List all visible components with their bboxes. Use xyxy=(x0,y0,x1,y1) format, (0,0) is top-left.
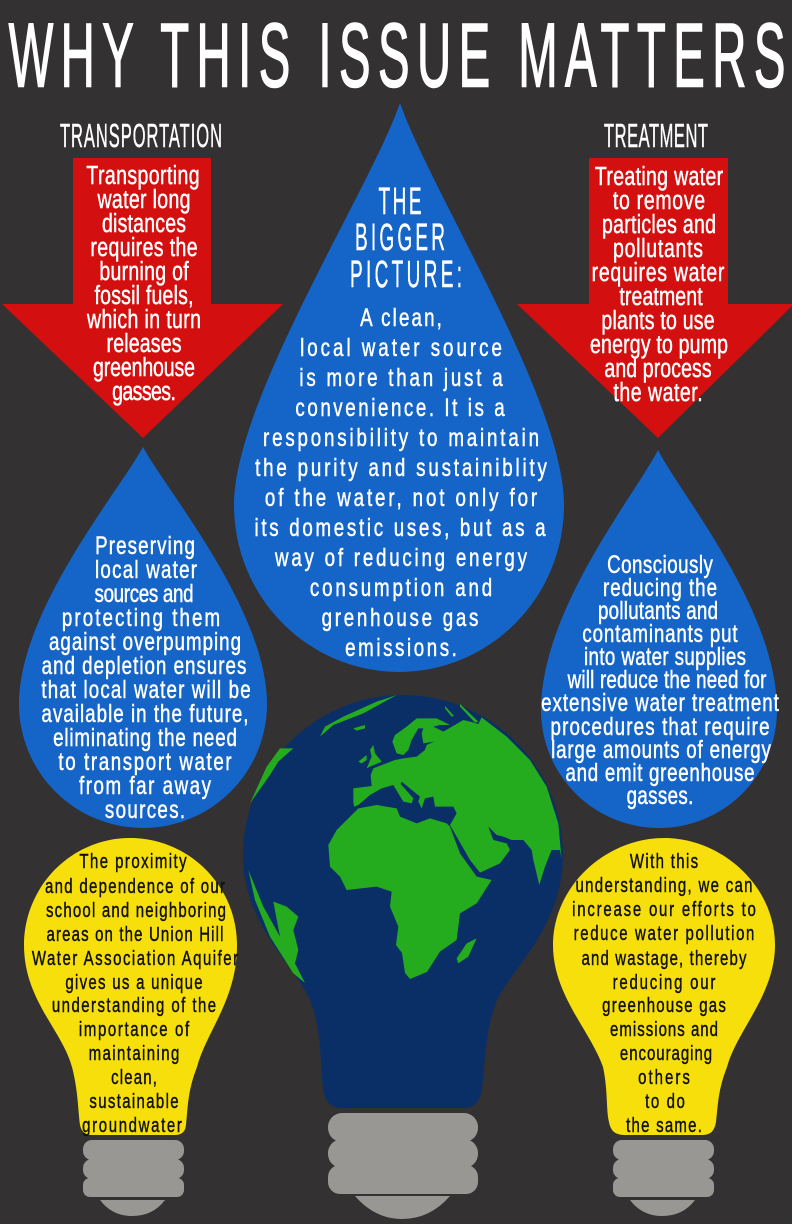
text: preserving local water: eliminating the need xyxy=(53,723,237,752)
panel: globe light bulb xyxy=(243,695,563,1219)
text: preserving local water: to transport water xyxy=(58,747,232,776)
text: transportation body xyxy=(86,160,201,406)
text: with this understanding: With this xyxy=(630,850,698,873)
text: with this understanding: reducing our xyxy=(613,971,715,994)
text: proximity and dependence xyxy=(32,850,238,1137)
text: transportation body: releases xyxy=(106,328,182,358)
text: transportation body: which in turn xyxy=(86,304,201,334)
panel: treatment arrow xyxy=(517,117,792,438)
text: treatment body: energy to pump xyxy=(590,329,728,359)
text: bigger picture body: A clean, xyxy=(360,303,442,332)
text: bigger picture body: way of reducing energy xyxy=(274,543,527,572)
icon: right blue water drop xyxy=(541,450,777,828)
heading: the bigger picture xyxy=(350,181,462,296)
text: bigger picture body xyxy=(255,303,547,662)
text: treatment body: requires water xyxy=(592,257,725,287)
text: treatment body: treatment xyxy=(619,281,703,311)
icon: left bulb glass xyxy=(24,838,237,1135)
panel: right yellow light bulb xyxy=(553,838,775,1216)
text: proximity and dependence: sustainable xyxy=(89,1090,179,1113)
icon: right bulb screw base xyxy=(613,1140,714,1216)
text: bigger picture body: emissions. xyxy=(345,633,457,662)
text: preserving local water: available in the future, xyxy=(41,699,249,728)
text: bigger picture body: convenience. It is a xyxy=(295,393,505,422)
text: with this understanding: increase our efforts to xyxy=(572,898,756,921)
text: consciously reducing pollutants: Consciously xyxy=(607,550,713,579)
text: transportation body: gasses. xyxy=(112,376,176,406)
text: treatment body: pollutants xyxy=(613,233,703,263)
text: preserving local water: that local water will be xyxy=(41,675,251,704)
text: bigger picture body: responsibility to maintain xyxy=(263,423,539,452)
text: bigger picture body: the purity and sustainiblity xyxy=(255,453,547,482)
heading: transportation: TRANSPORTATION xyxy=(60,117,222,155)
text: treatment body: Treating water xyxy=(595,161,723,191)
icon: right bulb glass xyxy=(553,838,775,1135)
text: bigger picture body: its domestic uses, but as a xyxy=(255,513,546,542)
text: consciously reducing pollutants: and emit greenhouse xyxy=(566,758,754,787)
text: proximity and dependence: and dependence of our xyxy=(45,875,225,898)
text: consciously reducing pollutants: large amounts of energy xyxy=(551,735,771,764)
text: treatment body: and process xyxy=(604,353,712,383)
panel: left water drop xyxy=(19,447,267,828)
panel: the bigger picture drop xyxy=(234,103,564,672)
text: proximity and dependence: school and neighboring xyxy=(46,899,226,922)
heading: the bigger picture: BIGGER xyxy=(355,217,445,259)
icon: left bulb screw base xyxy=(83,1140,184,1216)
heading: the bigger picture: PICTURE: xyxy=(350,254,462,296)
text: preserving local water xyxy=(41,531,251,824)
text: bigger picture body: is more than just a xyxy=(299,363,503,392)
title: WHY THIS ISSUE MATTERS xyxy=(9,5,785,107)
text: transportation body: water long xyxy=(97,184,190,214)
text: proximity and dependence: The proximity xyxy=(79,850,187,873)
text: transportation body: Transporting xyxy=(86,160,200,190)
icon: globe bulb glass xyxy=(243,695,563,1108)
text: treatment body: particles and xyxy=(602,209,716,239)
text: bigger picture body: grenhouse gas xyxy=(322,603,478,632)
icon: continents xyxy=(248,695,562,983)
text: with this understanding: understanding, we can xyxy=(576,874,752,897)
text: consciously reducing pollutants: gasses. xyxy=(627,781,693,810)
text: with this understanding: reduce water pollution xyxy=(574,922,754,945)
text: transportation body: distances xyxy=(102,208,186,238)
text: with this understanding: and wastage, thereby xyxy=(582,947,747,970)
text: transportation body: burning of xyxy=(99,256,189,286)
text: with this understanding: the same. xyxy=(626,1114,702,1137)
text: preserving local water: against overpumping xyxy=(49,627,241,656)
text: with this understanding xyxy=(572,850,756,1137)
text: with this understanding: encouraging xyxy=(620,1042,712,1065)
text: treatment body xyxy=(590,161,728,407)
text: preserving local water: sources and xyxy=(94,579,194,608)
text: with this understanding: others xyxy=(638,1066,690,1089)
text: proximity and dependence: areas on the Union Hill xyxy=(46,923,224,946)
text: transportation body: fossil fuels, xyxy=(94,280,194,310)
text: bigger picture body: local water source xyxy=(300,333,502,362)
text: treatment body: the water. xyxy=(613,377,703,407)
text: preserving local water: local water xyxy=(95,555,197,584)
icon: red down arrow right xyxy=(517,158,792,438)
text: with this understanding: emissions and xyxy=(610,1018,718,1041)
heading: treatment: TREATMENT xyxy=(604,117,708,155)
text: treatment body: plants to use xyxy=(601,305,715,335)
text: proximity and dependence: clean, xyxy=(111,1066,157,1089)
text: transportation body: greenhouse xyxy=(93,352,195,382)
icon: red down arrow xyxy=(2,158,283,438)
text: consciously reducing pollutants: extensive water treatment xyxy=(541,688,779,717)
panel: transportation arrow xyxy=(2,117,283,438)
text: consciously reducing pollutants: pollutants and xyxy=(598,596,718,625)
icon: left blue water drop xyxy=(19,447,267,828)
text: consciously reducing pollutants: contaminants put xyxy=(582,619,738,648)
text: consciously reducing pollutants: reducing the xyxy=(603,573,717,602)
text: bigger picture body: consumption and xyxy=(310,573,492,602)
text: with this understanding: greenhouse gas xyxy=(602,994,726,1017)
icon: large blue water drop xyxy=(234,103,564,672)
text: consciously reducing pollutants: will reduce the need for xyxy=(567,665,766,694)
panel: right water drop xyxy=(541,450,779,828)
text: proximity and dependence: gives us a unique xyxy=(65,971,203,994)
text: proximity and dependence: maintaining xyxy=(89,1042,179,1065)
panel: left yellow light bulb xyxy=(24,838,238,1216)
text: proximity and dependence: importance of xyxy=(79,1018,189,1041)
text: proximity and dependence: understanding of the xyxy=(52,994,216,1017)
text: consciously reducing pollutants: into water supplies xyxy=(584,642,746,671)
heading: the bigger picture: THE xyxy=(378,181,422,223)
text: proximity and dependence: groundwater xyxy=(82,1114,182,1137)
icon: globe bulb screw base xyxy=(328,1113,478,1219)
text: with this understanding: to do xyxy=(645,1090,685,1113)
text: preserving local water: from far away xyxy=(79,771,211,800)
text: transportation body: requires the xyxy=(90,232,198,262)
text: preserving local water: protecting them xyxy=(62,603,220,632)
text: proximity and dependence: Water Association Aquifer xyxy=(32,947,238,970)
text: treatment body: to remove xyxy=(613,185,705,215)
text: preserving local water: Preserving xyxy=(95,531,195,560)
text: consciously reducing pollutants: procedures that require xyxy=(550,712,770,741)
text: preserving local water: and depletion ensures xyxy=(42,651,246,680)
text: preserving local water: sources. xyxy=(105,795,185,824)
text: bigger picture body: of the water, not only for xyxy=(265,483,537,512)
text: consciously reducing pollutants xyxy=(541,550,779,810)
